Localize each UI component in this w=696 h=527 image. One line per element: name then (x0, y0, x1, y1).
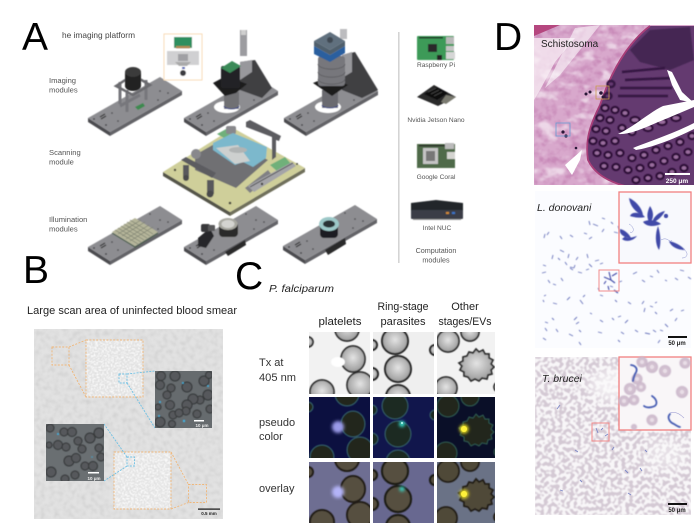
computation: intel nuc (411, 200, 463, 220)
label: illumination modules: Illumination (49, 215, 87, 224)
label: computation modules: Computation (416, 246, 456, 255)
label: imaging modules (49, 76, 78, 94)
smear scan background (34, 329, 223, 519)
image: pseudo color ring stage (373, 397, 434, 458)
scale bar 0.5 mm (198, 508, 220, 516)
label: computation modules (416, 246, 456, 264)
panel A: imaging platform (22, 16, 465, 265)
imaging module 3 (284, 29, 378, 136)
row labels: 405 nm (259, 372, 296, 384)
label: nvidia jetson nano: Nvidia Jetson Nano (407, 117, 465, 124)
row labels: pseudo (259, 417, 295, 429)
image: overlay ring stage (373, 462, 434, 523)
label: google coral: Google Coral (417, 174, 456, 181)
label: schistosoma: Schistosoma (541, 39, 599, 50)
computation: nvidia jetson nano (417, 85, 456, 106)
panel letter B: B (23, 249, 49, 292)
column headers: Ring-stage (378, 301, 428, 313)
zoom level 1 bottom (114, 452, 171, 509)
label: scanning module: Scanning (49, 148, 81, 157)
panel letter C: C (235, 255, 263, 298)
illumination module 3 (283, 205, 377, 264)
image: overlay other stages (437, 462, 495, 523)
image: transmission other stages (437, 332, 495, 394)
image: pseudo color other stages (437, 397, 495, 458)
image: transmission platelets (309, 332, 370, 394)
scale bar T. brucei: 50 μm (668, 508, 686, 514)
image: T. brucei (535, 357, 691, 515)
label: illumination modules (49, 215, 87, 234)
micrograph inset top right (155, 371, 214, 428)
image: L. donovani (535, 191, 691, 348)
column headers: Other (451, 301, 479, 313)
row labels: color (259, 431, 283, 443)
row labels (259, 357, 296, 495)
label: raspberry pi: Raspberry Pi (417, 62, 456, 69)
row labels: Tx at (259, 357, 283, 369)
panel D: parasites (494, 16, 696, 515)
orange zoom guides (52, 340, 206, 509)
scale bar L. donovani (668, 336, 687, 347)
image: pseudo color platelets (309, 397, 370, 458)
micrograph inset lower left (46, 424, 105, 483)
panel B: blood smear scan (23, 249, 237, 519)
scale label 10 um: 10 μm (195, 423, 209, 428)
illumination module 2 (184, 206, 278, 265)
image: overlay platelets (309, 462, 370, 523)
label: scanning module: module (49, 158, 74, 166)
inset: camera board and lens (164, 34, 202, 80)
row labels: overlay (259, 483, 295, 495)
column headers: stages/EVs (438, 316, 492, 328)
scale label 10 um lower: 10 μm (87, 476, 101, 481)
divider (398, 32, 400, 263)
blue zoom guides (104, 371, 155, 481)
heading: imaging platform: he imaging platform (62, 31, 135, 40)
heading: P. falciparum: P. falciparum (269, 283, 334, 295)
heading: large scan area: Large scan area of uninfected blood smear (27, 305, 237, 317)
computation: google coral (417, 143, 455, 168)
column headers (318, 301, 492, 328)
scale bar T. brucei (668, 503, 687, 514)
panel C: P. falciparum (235, 255, 504, 527)
column headers: platelets (318, 316, 362, 328)
imaging module 2 (184, 30, 278, 136)
scale bar L. donovani: 50 μm (668, 341, 686, 347)
zoom level 1 top (86, 340, 143, 397)
imaging module 1 (88, 67, 182, 136)
scale bar 0.5 mm: 0.5 mm (201, 511, 217, 516)
label: imaging modules: Imaging (49, 76, 76, 85)
scale bar 250 um (665, 173, 690, 185)
panel letter D: D (494, 16, 522, 59)
computation: raspberry pi (417, 36, 455, 60)
label: computation modules: modules (422, 256, 450, 264)
label: imaging modules: modules (49, 86, 78, 94)
image: schistosoma histology (534, 25, 696, 186)
label: illumination modules: modules (49, 224, 78, 234)
label: L. donovani: L. donovani (537, 202, 592, 214)
label: intel nuc: Intel NUC (423, 225, 452, 232)
label: scanning module (49, 148, 81, 166)
panel letter A: A (22, 16, 48, 59)
image: transmission ring stage (373, 332, 434, 394)
column headers: parasites (380, 316, 426, 328)
illumination module 1 (88, 206, 182, 265)
scanning module (163, 120, 305, 216)
label: T. brucei: T. brucei (542, 373, 583, 385)
scale bar 250 um: 250 μm (666, 178, 688, 185)
